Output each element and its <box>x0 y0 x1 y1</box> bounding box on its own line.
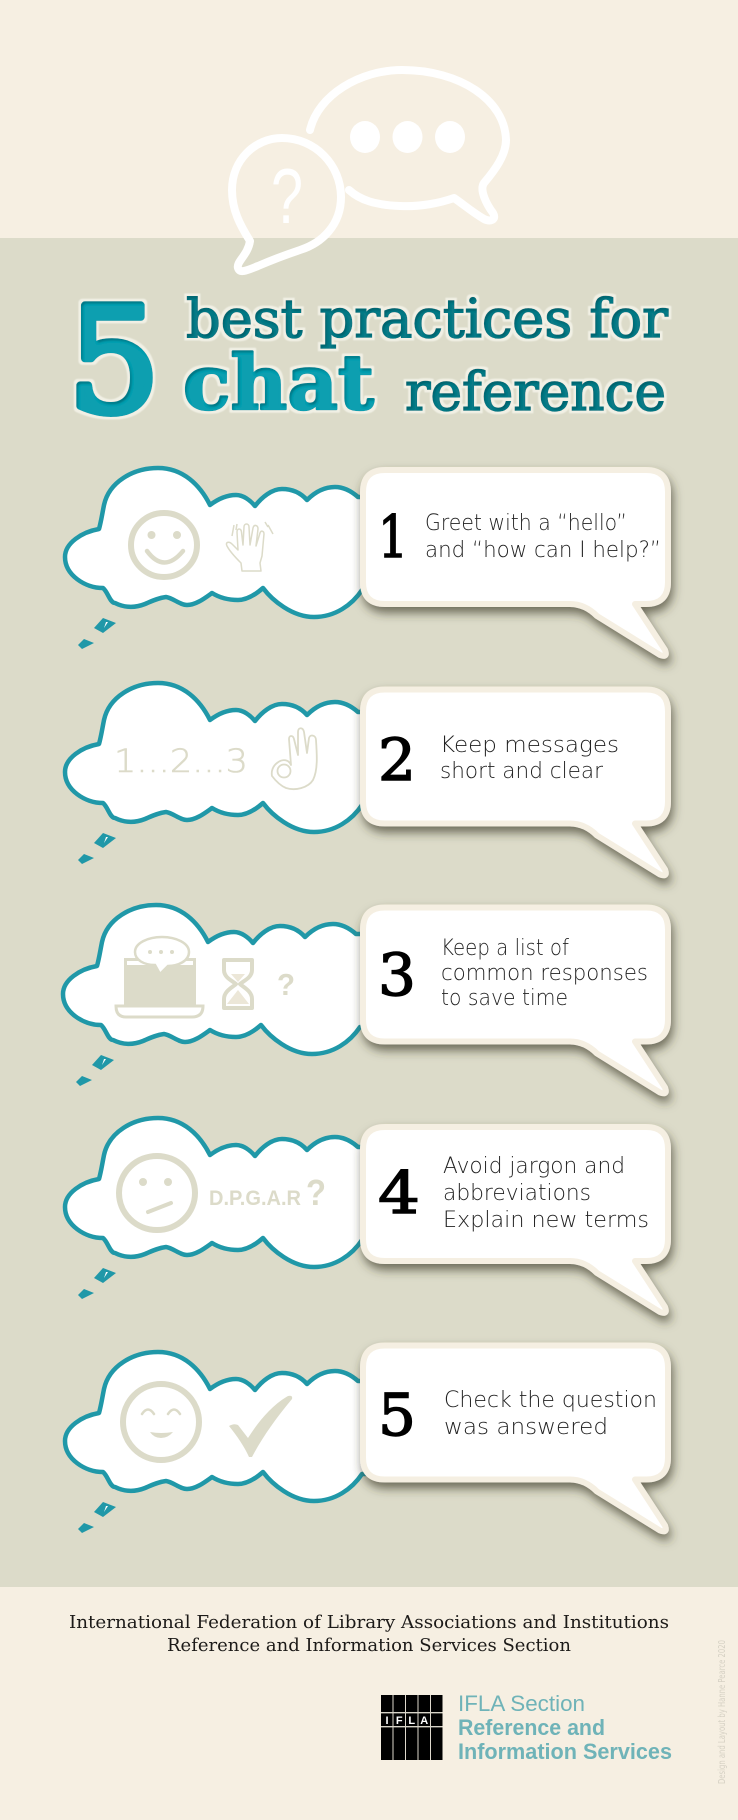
number 4: 4 <box>378 1159 420 1227</box>
text: step 2: short and clear <box>440 759 604 784</box>
speech card 2 <box>363 690 668 875</box>
design credit: Design and Layout by Hanne Pearce 2020 <box>717 1640 728 1784</box>
text: step 2 <box>440 733 619 784</box>
footer organisation text: International Federation of Library Associations and Institutions <box>69 1612 669 1633</box>
speech card 5 <box>363 1346 668 1531</box>
icon: large speech bubble with dots <box>310 70 506 220</box>
icon: smiley face <box>131 513 197 577</box>
thought cloud 1 <box>65 468 380 649</box>
step 3 <box>63 905 668 1093</box>
footer organisation text <box>69 1612 669 1656</box>
IFLA logo <box>381 1695 442 1760</box>
title word: reference: reference <box>405 362 666 423</box>
icon: abbreviation D.P.G.A.R: D.P.G.A.R <box>209 1187 301 1210</box>
icon: question mark: ? <box>277 967 295 1002</box>
step 5 <box>65 1346 668 1533</box>
text: step 3 <box>441 936 648 1011</box>
IFLA logo: A <box>420 1715 428 1727</box>
IFLA logo: F <box>396 1715 403 1727</box>
speech card 3 <box>363 908 668 1093</box>
background: middle panel <box>0 238 738 1587</box>
text: step 1: and “how can I help?” <box>425 538 661 563</box>
title numeral 5: 5 <box>68 277 160 446</box>
thought cloud 2 <box>65 683 380 864</box>
text: step 4: Explain new terms <box>443 1208 649 1233</box>
IFLA section name: Reference and <box>458 1715 605 1740</box>
IFLA section name: Information Services <box>458 1739 672 1764</box>
text: step 3: common responses <box>441 961 648 986</box>
icon: waving hand <box>226 522 273 571</box>
icon: small speech bubble with question mark: ? <box>271 152 303 240</box>
icon: hourglass <box>224 960 252 1008</box>
icon: small speech bubble with question mark <box>232 138 341 271</box>
text: step 1 <box>425 511 661 563</box>
icon: happy face <box>123 1384 199 1460</box>
text: step 3: to save time <box>441 986 568 1011</box>
text: step 3: Keep a list of <box>441 936 569 961</box>
icon: counting 1 2 3: 1...2...3 <box>114 742 248 780</box>
title <box>68 277 669 446</box>
thought cloud 5 <box>65 1352 380 1533</box>
title word: chat: chat <box>183 338 374 427</box>
icon: confused face <box>119 1156 195 1230</box>
text: step 4: Avoid jargon and <box>443 1154 625 1179</box>
text: step 5: Check the question <box>444 1388 657 1413</box>
step 1 <box>65 468 668 656</box>
background: top band <box>0 0 738 238</box>
icon: laptop with speech bubble <box>116 937 203 1017</box>
step 2 <box>65 683 668 875</box>
text: step 5: was answered <box>444 1415 608 1440</box>
icon: question mark: ? <box>306 1172 326 1213</box>
icon: chat bubbles <box>232 70 506 271</box>
text: step 2: Keep messages <box>440 733 619 758</box>
text: step 5 <box>444 1388 657 1440</box>
number 2: 2 <box>378 726 416 794</box>
icon: OK hand <box>272 728 317 789</box>
thought cloud 4 <box>65 1118 380 1299</box>
number 5: 5 <box>378 1381 416 1449</box>
icon: check mark <box>229 1396 292 1457</box>
step 4 <box>65 1118 668 1313</box>
background: footer panel <box>0 1587 738 1820</box>
speech card 4 <box>363 1127 668 1313</box>
thought cloud 3 <box>63 905 378 1086</box>
speech card 1 <box>363 470 668 656</box>
IFLA section name <box>458 1691 672 1764</box>
title line: best practices for: best practices for <box>186 289 669 350</box>
IFLA section name: IFLA Section <box>458 1691 585 1716</box>
text: step 4 <box>443 1154 649 1233</box>
number 1: 1 <box>378 503 408 571</box>
number 3: 3 <box>378 941 416 1009</box>
IFLA logo: I <box>385 1715 389 1727</box>
footer organisation text: Reference and Information Services Section <box>167 1635 571 1656</box>
IFLA logo: L <box>408 1715 415 1727</box>
text: step 1: Greet with a “hello” <box>425 511 627 536</box>
text: step 4: abbreviations <box>443 1181 591 1206</box>
